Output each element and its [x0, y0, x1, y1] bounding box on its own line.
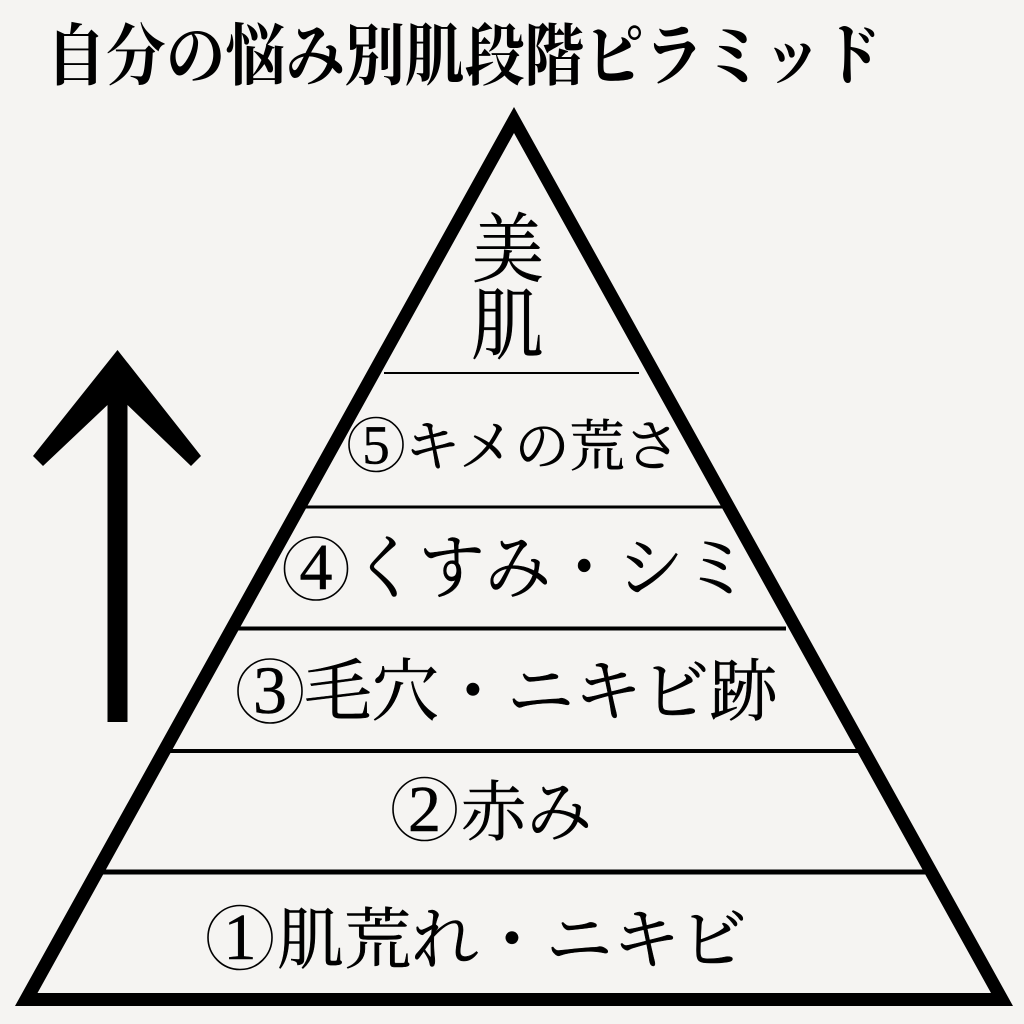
- tier 4 label: 4: [300, 531, 332, 604]
- top tier label: 美肌: [471, 209, 544, 370]
- tier dividers: [103, 373, 926, 872]
- tier 2 label: [393, 773, 592, 850]
- tier 5 label: 5: [362, 414, 390, 476]
- tier 1 label: 肌荒れ・ニキビ: [277, 904, 747, 978]
- tier 5 label: キメの荒さ: [405, 417, 680, 479]
- tier 1 label: 1: [224, 901, 256, 974]
- tier 2 label: 2: [408, 773, 441, 846]
- icon: upward arrow: [33, 350, 201, 722]
- top tier label: 美肌: 美: [472, 209, 544, 293]
- title: 自分の悩み別肌段階ピラミッド: [46, 19, 882, 95]
- tier 2 label: 赤み: [461, 777, 592, 850]
- tier 4 label: くすみ・シミ: [352, 529, 750, 607]
- top tier label: 美肌: 肌: [471, 284, 544, 370]
- tier 3 label: 3: [253, 652, 287, 728]
- tier 3 label: 毛穴・ニキビ跡: [304, 654, 780, 730]
